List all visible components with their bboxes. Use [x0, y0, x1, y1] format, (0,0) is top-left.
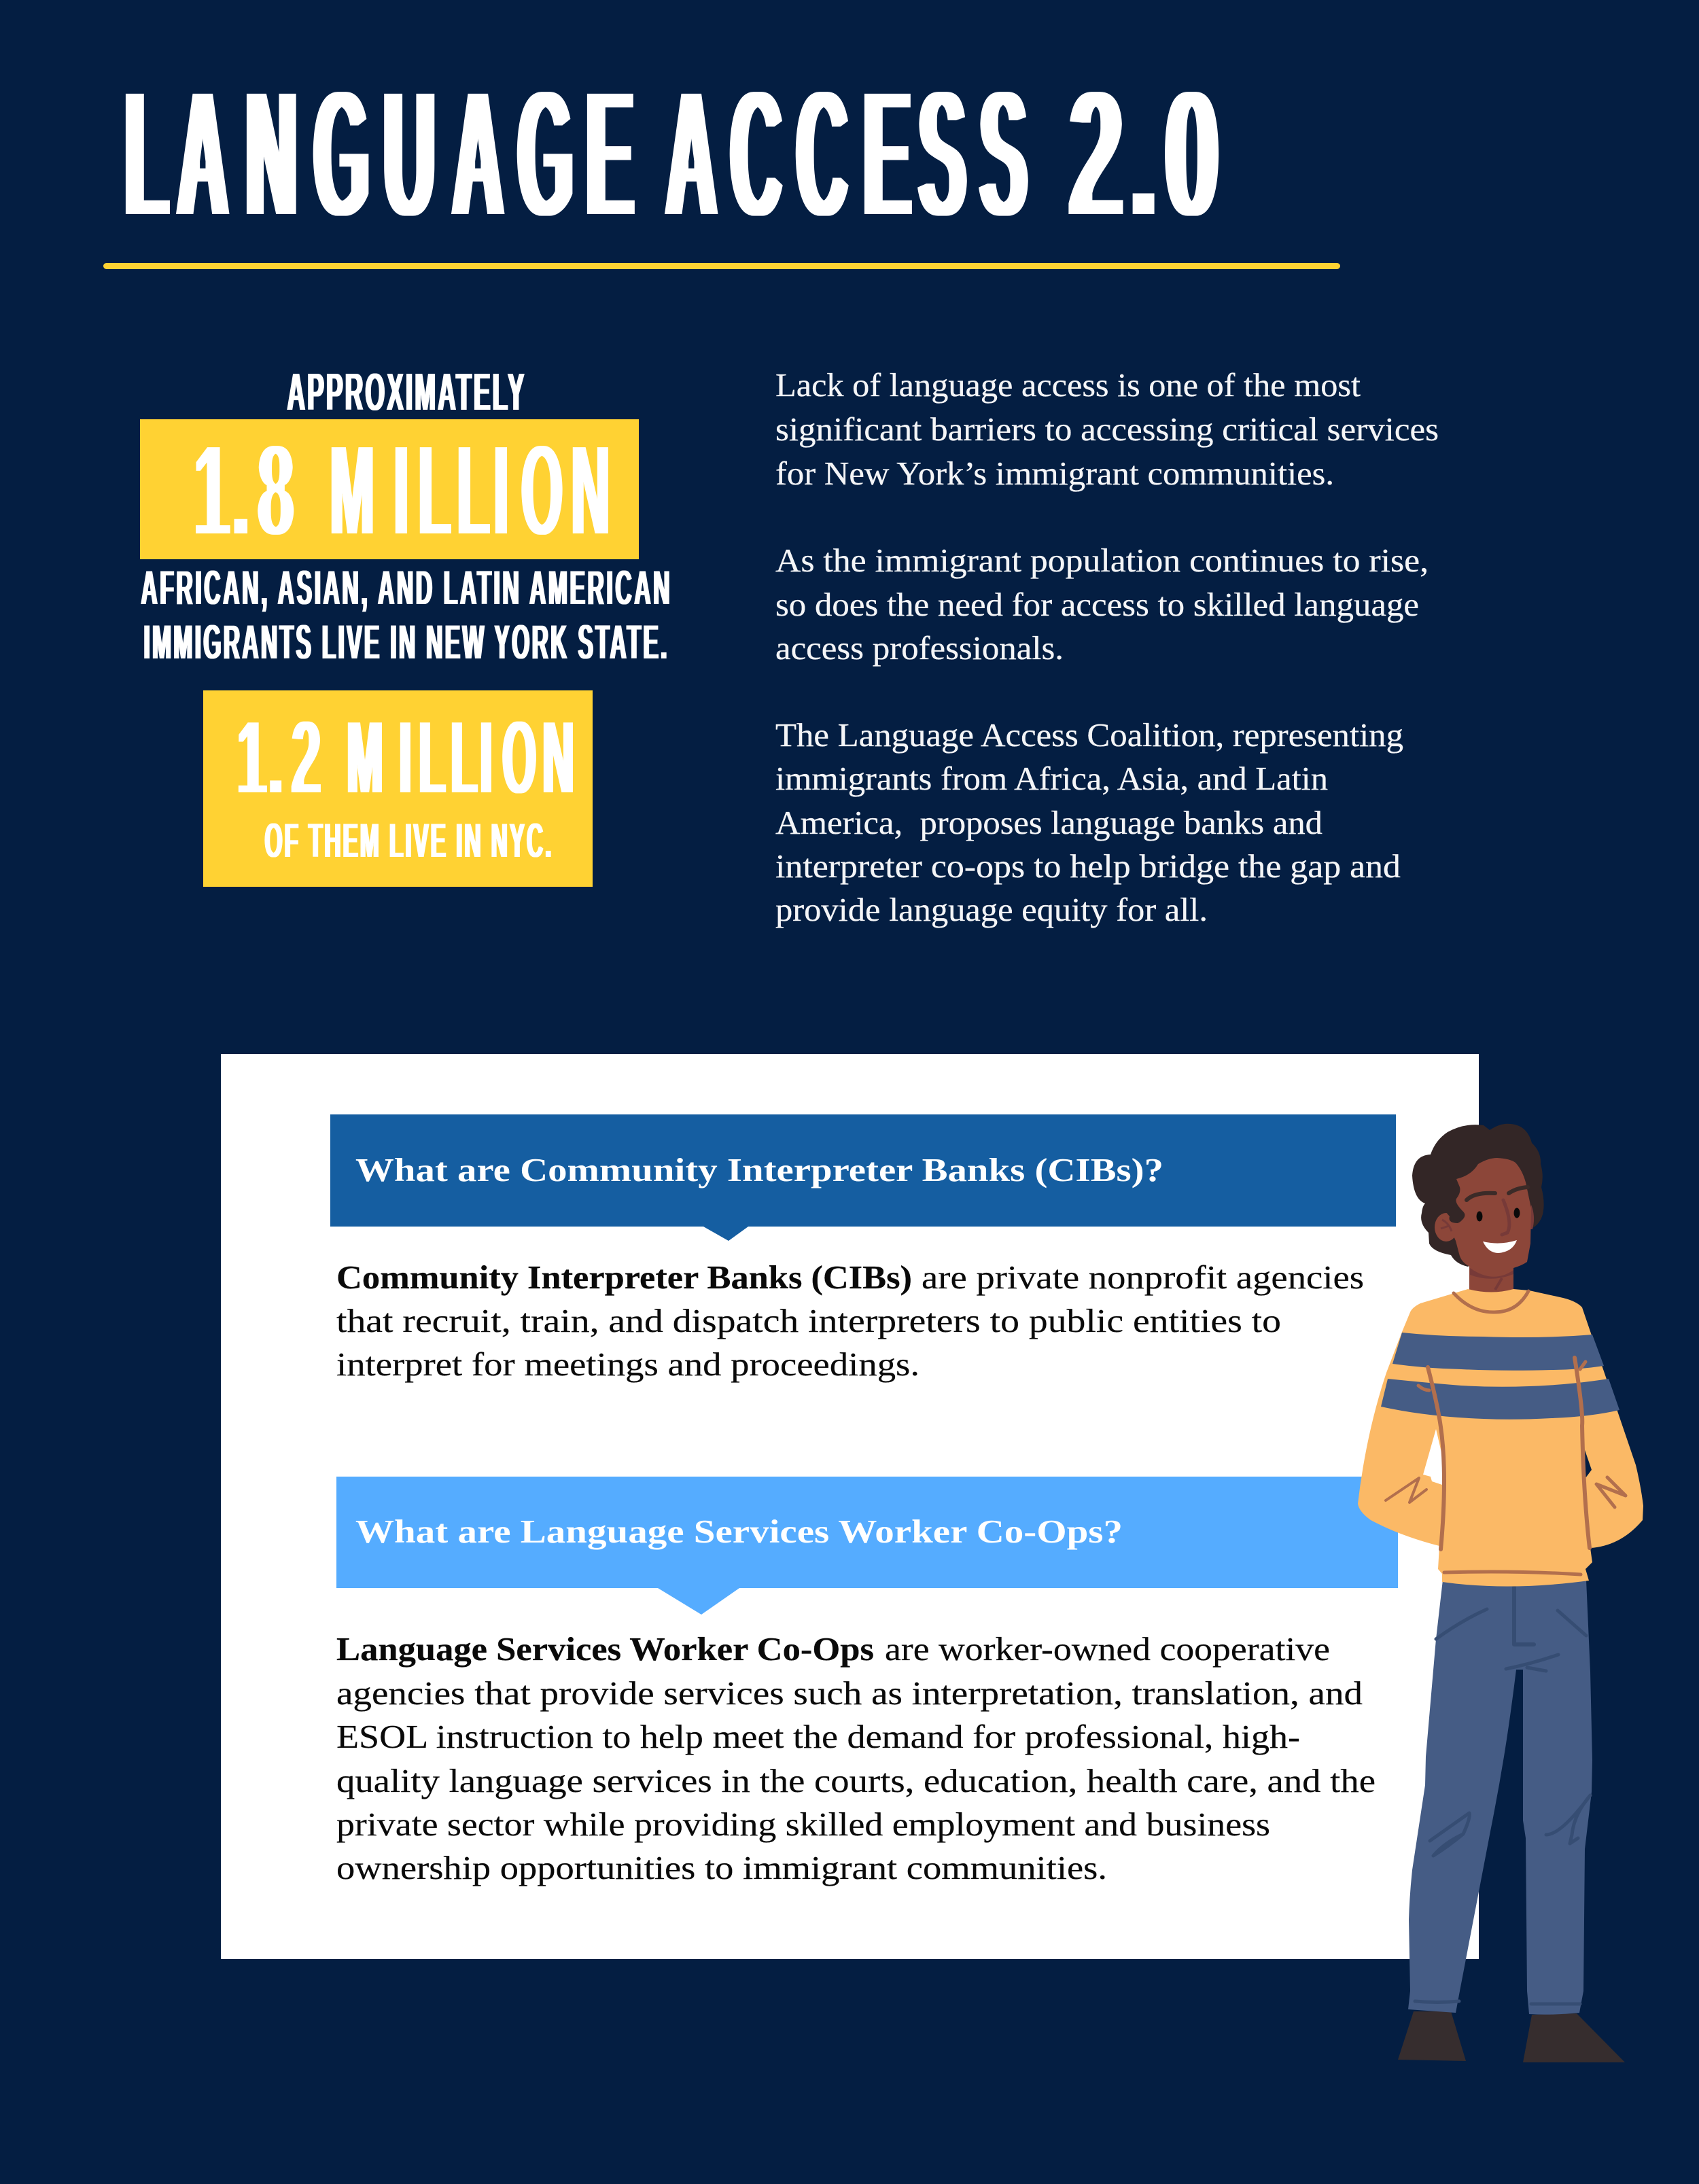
text block: introduction — [775, 366, 1439, 928]
shoes — [1398, 2011, 1625, 2062]
illustration: standing person — [1358, 1124, 1643, 2062]
heading banner: Language Services Worker Co-Ops — [336, 1477, 1398, 1615]
text block: introduction: for New York’s immigrant communities. — [775, 455, 1334, 492]
text block: CIB definition: that recruit, train, and dispatch interpreters to public entities to — [336, 1302, 1281, 1339]
title: 2.0 — [1069, 50, 1219, 257]
text block: introduction: immigrants from Africa, Asia, and Latin — [775, 760, 1328, 797]
stat box: 1.8 million: 1.8 — [194, 415, 294, 565]
text block: CIB definition — [336, 1258, 1364, 1383]
text block: introduction: interpreter co-ops to help bridge the gap and — [775, 847, 1401, 885]
text block: introduction: access professionals. — [775, 629, 1064, 667]
text block: co-op definition: are worker-owned cooperative — [885, 1630, 1330, 1668]
text block: co-op definition: Language Services Worker Co-Ops — [336, 1630, 874, 1668]
text block: introduction: significant barriers to accessing critical services — [775, 410, 1439, 448]
text block: introduction: provide language equity for all. — [775, 891, 1208, 928]
stat box: 1.2 million — [203, 690, 593, 887]
stat box: 1.2 million: 1.2 — [237, 698, 321, 817]
panel: statistics — [140, 362, 670, 887]
arm gaps — [1423, 1429, 1443, 1485]
sweater — [1358, 1289, 1643, 1587]
text block: co-op definition: private sector while providing skilled employment and business — [336, 1806, 1270, 1843]
text block: CIB definition: Community Interpreter Banks (CIBs) — [336, 1258, 912, 1296]
title: LANGUAGE ACCESS — [125, 50, 1027, 257]
text block: introduction: Lack of language access is one of the most — [775, 366, 1361, 404]
jeans — [1408, 1580, 1592, 2015]
stat box: 1.2 million: OF THEM LIVE IN NYC. — [264, 814, 551, 869]
text block: introduction: As the immigrant population continues to rise, — [775, 542, 1429, 579]
heading banner: Language Services Worker Co-Ops: What are Language Services Worker Co-Ops? — [355, 1513, 1123, 1550]
neck and head — [1412, 1124, 1544, 1294]
stat description: AFRICAN, ASIAN, AND LATIN AMERICAN — [141, 561, 670, 616]
heading banner: Community Interpreter Banks — [330, 1114, 1396, 1241]
stat description — [141, 561, 670, 671]
heading banner: Community Interpreter Banks: What are Community Interpreter Banks (CIBs)? — [355, 1151, 1163, 1188]
text block: introduction: America, proposes language banks and — [775, 804, 1323, 841]
panel: definitions — [221, 1054, 1479, 1959]
stat description: IMMIGRANTS LIVE IN NEW YORK STATE. — [144, 616, 667, 671]
title underline — [103, 263, 1340, 269]
text block: introduction: The Language Access Coalition, representing — [775, 716, 1403, 754]
text block: CIB definition: are private nonprofit agencies — [922, 1258, 1364, 1296]
stat box: 1.8 million — [140, 415, 639, 565]
text block: co-op definition: quality language services in the courts, education, health care, and the — [336, 1762, 1376, 1799]
text block: introduction: so does the need for access to skilled language — [775, 586, 1419, 623]
text block: co-op definition: ownership opportunities to immigrant communities. — [336, 1849, 1107, 1886]
text block: CIB definition: interpret for meetings and proceedings. — [336, 1345, 919, 1383]
stat box: 1.8 million: MILLION — [330, 416, 610, 565]
text block: co-op definition: ESOL instruction to help meet the demand for professional, high- — [336, 1718, 1300, 1755]
text block: co-op definition: agencies that provide services such as interpretation, translation, and — [336, 1674, 1363, 1712]
label: approximately: APPROXIMATELY — [287, 362, 525, 423]
text block: co-op definition — [336, 1630, 1376, 1886]
stat box: 1.2 million: MILLION — [347, 698, 574, 817]
